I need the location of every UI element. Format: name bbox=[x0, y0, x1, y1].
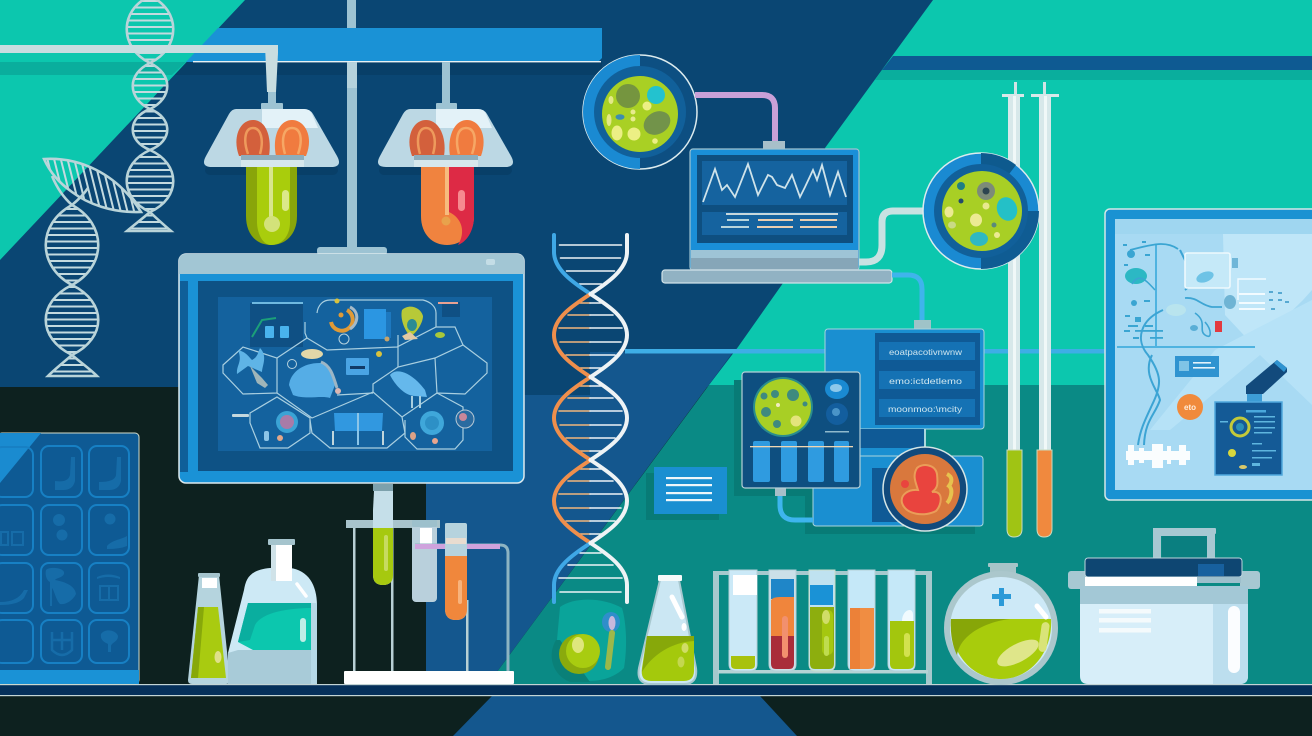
display chart box bbox=[1166, 253, 1289, 336]
control panel with text rows bbox=[825, 320, 984, 429]
tube 3 bbox=[809, 570, 835, 671]
orange badge: eto bbox=[1184, 403, 1196, 412]
orange badge bbox=[1177, 394, 1203, 420]
report card bbox=[1215, 394, 1282, 475]
microbe dish 1 bbox=[583, 55, 697, 169]
helix line on display bbox=[1138, 250, 1191, 445]
tube 5 bbox=[888, 570, 915, 671]
supply pipe and funnel bbox=[0, 45, 278, 92]
laptop bbox=[662, 141, 892, 283]
control panel with text rows: eoatpacotivnwnw bbox=[889, 347, 963, 357]
lamp with green tube bbox=[204, 92, 339, 245]
DNA helix: top left bbox=[127, 0, 173, 231]
shelf bbox=[0, 684, 1312, 696]
display note bbox=[1175, 356, 1219, 377]
microbe panel bbox=[742, 372, 860, 488]
tube 1 bbox=[729, 570, 757, 671]
DNA helix: lower left bbox=[44, 159, 141, 376]
long test tubes bbox=[1002, 82, 1059, 537]
white comb bbox=[1126, 444, 1190, 468]
microscope bbox=[1246, 360, 1287, 394]
white pipe to dish 2 bbox=[859, 211, 925, 262]
control panel with text rows: emo:ictdetlemo bbox=[889, 376, 962, 386]
tube 4 bbox=[848, 570, 875, 671]
microbe panel pipe bbox=[775, 488, 813, 520]
tube 2 bbox=[769, 570, 796, 671]
pink tube bbox=[695, 95, 775, 142]
control panel with text rows: moonmoo:\mcity bbox=[888, 404, 963, 414]
conical flask: middle bbox=[638, 575, 696, 684]
lamp with orange and red tube bbox=[378, 62, 513, 245]
overhead blue bar bbox=[186, 0, 602, 62]
conical flask: left bbox=[188, 573, 230, 684]
central pole bbox=[317, 62, 387, 255]
blue pipe from laptop bbox=[892, 275, 922, 322]
test tube rack: middle bbox=[713, 570, 932, 684]
left tile panel bbox=[0, 433, 139, 684]
right wall display bbox=[1105, 209, 1312, 500]
microbe dish 2 bbox=[923, 153, 1039, 269]
monitor icons bbox=[232, 298, 474, 445]
red cell dish bbox=[883, 447, 967, 531]
network diagram bbox=[223, 300, 487, 449]
panel shadows bbox=[646, 380, 975, 534]
main monitor bbox=[179, 254, 524, 483]
molecule cluster bbox=[1123, 241, 1178, 339]
DNA double helix: centre bbox=[554, 235, 627, 602]
test tube rack: left bbox=[344, 484, 514, 684]
medicine bottle bbox=[228, 539, 317, 684]
lower blue panel bbox=[813, 429, 983, 526]
teal specimen blob with sphere bbox=[552, 600, 626, 682]
blue note card bbox=[654, 467, 727, 514]
round flask bbox=[944, 563, 1058, 685]
horizontal blue pipe bbox=[625, 349, 1105, 354]
lab storage box bbox=[1068, 528, 1260, 684]
